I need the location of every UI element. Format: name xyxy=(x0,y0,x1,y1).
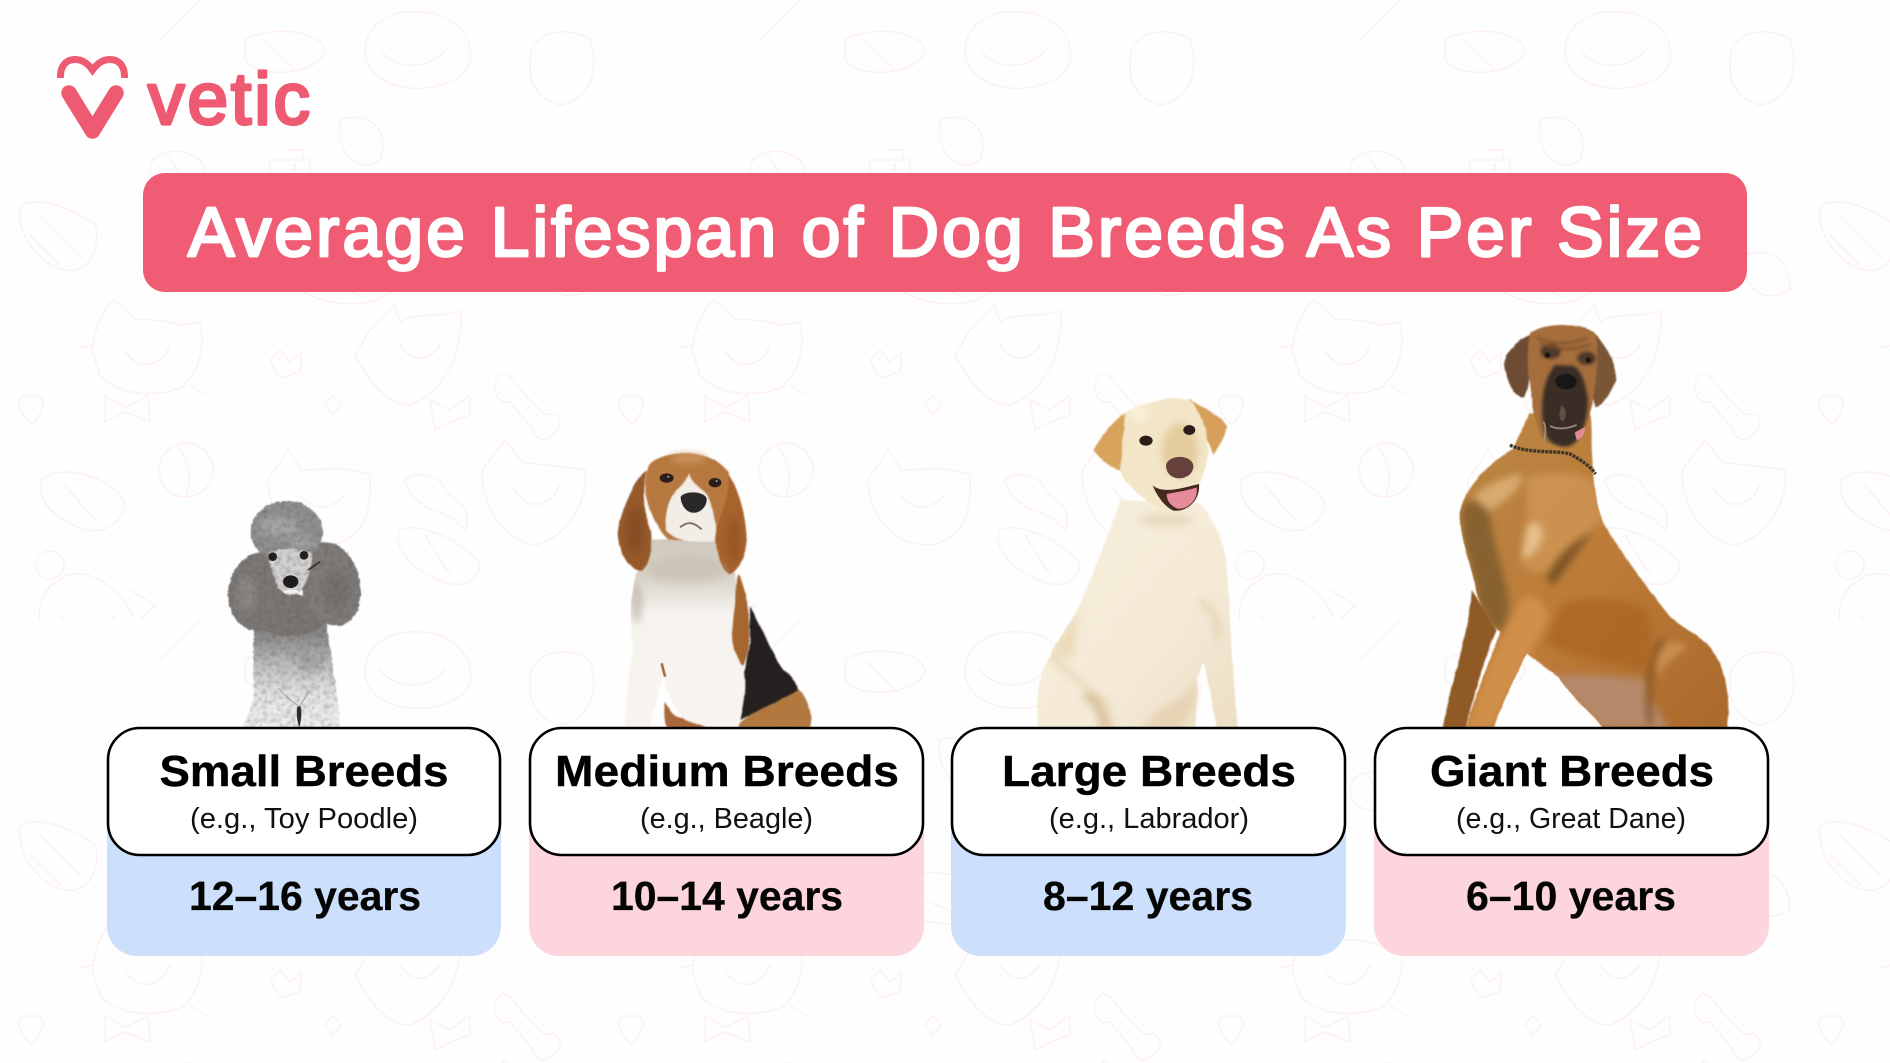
label panel: medium xyxy=(530,728,923,855)
lifespan panel: small xyxy=(107,790,501,956)
label panel: giant xyxy=(1375,728,1768,855)
title banner xyxy=(143,173,1747,292)
label panel: large xyxy=(952,728,1345,855)
example: great dane: (e.g., Great Dane) xyxy=(1456,803,1686,835)
lifespan: 6–10 years: 6–10 years xyxy=(1466,873,1676,919)
lifespan: 12–16 years: 12–16 years xyxy=(189,873,421,919)
dog: beagle xyxy=(618,453,811,728)
lifespan panel: large xyxy=(951,790,1346,956)
title: Average Lifespan of Dog Breeds As Per Size xyxy=(188,193,1702,271)
lifespan: 10–14 years: 10–14 years xyxy=(611,873,843,919)
lifespan: 8–12 years: 8–12 years xyxy=(1043,873,1253,919)
dog: great dane xyxy=(1443,325,1728,728)
logo: vetic xyxy=(60,59,310,140)
card: small breeds xyxy=(107,728,501,956)
heading: giant breeds: Giant Breeds xyxy=(1430,747,1714,796)
dog: labrador xyxy=(1037,398,1238,730)
icon: heart and V mark xyxy=(60,60,125,131)
example: beagle: (e.g., Beagle) xyxy=(640,803,813,835)
card: large breeds xyxy=(951,728,1346,956)
heading: large breeds: Large Breeds xyxy=(1002,747,1296,796)
heading: small breeds: Small Breeds xyxy=(160,747,448,796)
card: medium breeds xyxy=(529,728,924,956)
lifespan panel: medium xyxy=(529,790,924,956)
heading: medium breeds: Medium Breeds xyxy=(555,747,899,796)
card: giant breeds xyxy=(1374,728,1769,956)
example: labrador: (e.g., Labrador) xyxy=(1049,803,1249,835)
lifespan panel: giant xyxy=(1374,790,1769,956)
example: toy poodle: (e.g., Toy Poodle) xyxy=(190,803,418,835)
logo wordmark: vetic xyxy=(148,59,310,140)
dog: toy poodle xyxy=(222,501,369,730)
label panel: small xyxy=(108,728,500,855)
